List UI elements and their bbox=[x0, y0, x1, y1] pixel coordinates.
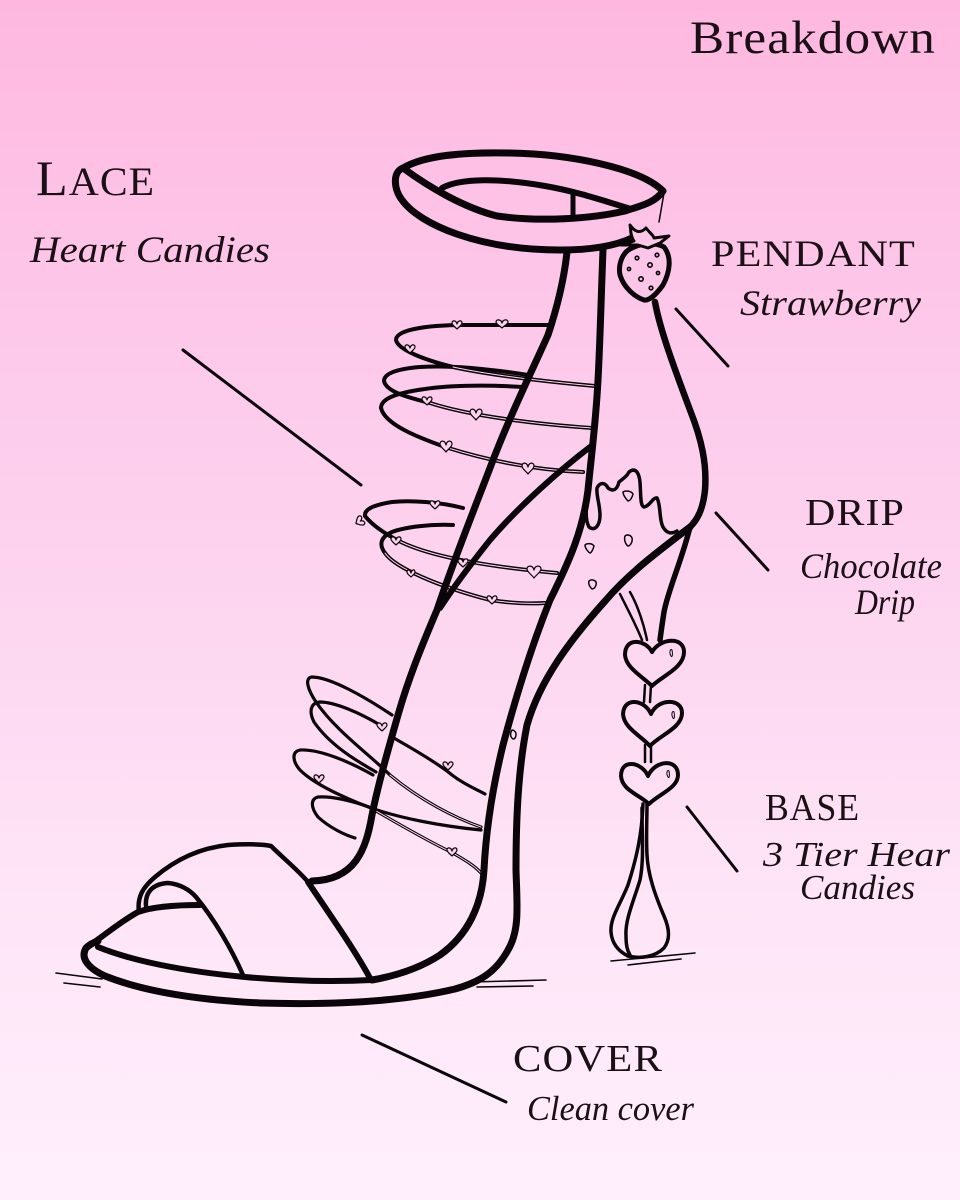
label: lace bbox=[29, 150, 270, 271]
shoe back and stem bbox=[655, 302, 705, 527]
label: base: 3 Tier Hear bbox=[762, 835, 950, 874]
label: base: Candies bbox=[800, 868, 915, 907]
heel stem bbox=[620, 527, 690, 762]
label: base bbox=[762, 787, 950, 907]
insole line bbox=[98, 947, 372, 981]
lower laces bbox=[294, 677, 485, 873]
rear strap and heel counter bbox=[372, 250, 603, 980]
lace heart candies bbox=[353, 320, 541, 604]
heel heart candies bbox=[621, 641, 684, 804]
label: cover: COVER bbox=[513, 1038, 663, 1080]
shoe straps and upper bbox=[84, 250, 705, 1004]
label: pendant: PENDANT bbox=[711, 234, 916, 275]
icon: strawberry pendant bbox=[620, 225, 669, 300]
icon: middle heart bbox=[623, 702, 682, 746]
icon: top heart bbox=[625, 641, 684, 686]
front ankle strap bbox=[312, 252, 567, 881]
label: drip: Chocolate bbox=[800, 546, 942, 586]
label: pendant bbox=[711, 234, 921, 323]
arch and outer sole bbox=[84, 527, 690, 1004]
forefoot edge bbox=[90, 905, 200, 945]
ground lines bbox=[56, 953, 695, 987]
label: drip bbox=[800, 492, 942, 622]
label: pendant: Strawberry bbox=[740, 283, 921, 323]
lower lace heart candies bbox=[314, 723, 457, 856]
diagonal strap bbox=[440, 447, 590, 608]
leader line: lace bbox=[183, 350, 361, 485]
heel drop base bbox=[611, 804, 668, 957]
title: Breakdown bbox=[690, 12, 936, 64]
leader line: drip bbox=[716, 513, 768, 570]
label: lace: Heart Candies bbox=[29, 230, 270, 271]
icon: bottom heart bbox=[621, 763, 678, 804]
ankle strap bbox=[395, 153, 664, 250]
vamp strap bbox=[139, 844, 308, 912]
upper laces bbox=[353, 320, 595, 604]
label: drip: DRIP bbox=[805, 492, 905, 534]
label: base: BASE bbox=[765, 787, 860, 829]
drip bbox=[511, 470, 677, 739]
toe strap bbox=[146, 883, 243, 975]
leader line: base bbox=[687, 807, 737, 871]
leader line: pendant bbox=[676, 309, 728, 366]
label: drip: Drip bbox=[854, 582, 915, 622]
leader line: cover bbox=[362, 1035, 506, 1102]
label: cover bbox=[513, 1038, 694, 1128]
label: lace: LACE bbox=[36, 150, 155, 206]
label: cover: Clean cover bbox=[527, 1089, 694, 1128]
